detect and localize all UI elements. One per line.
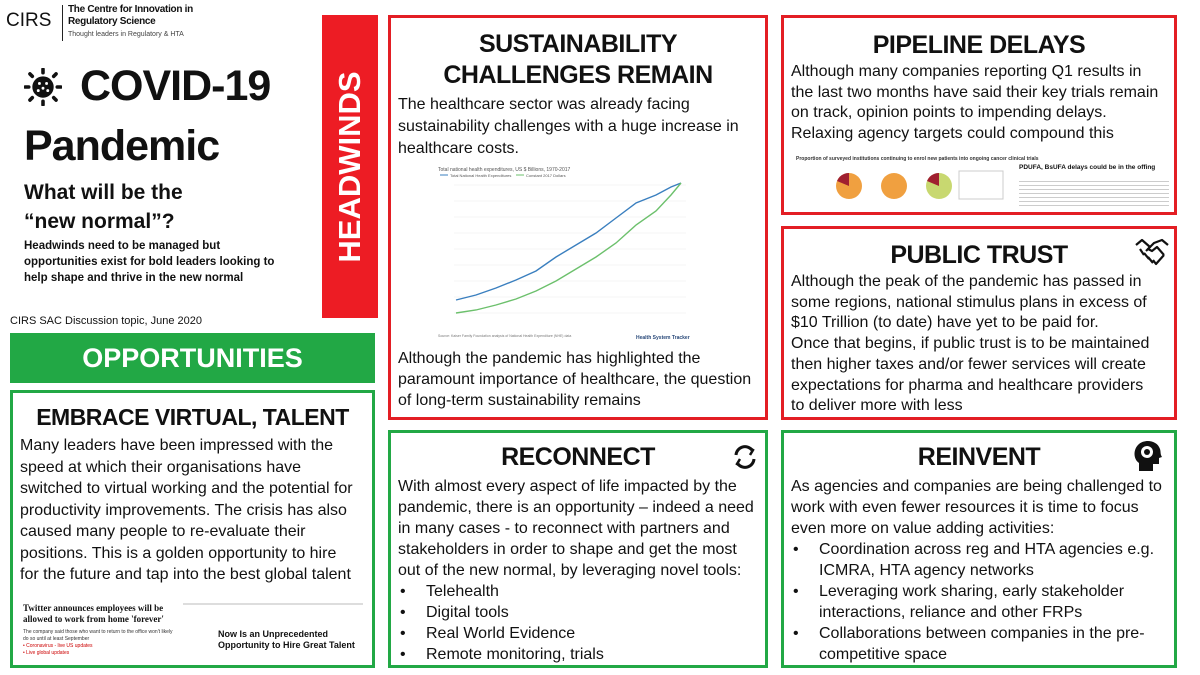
panel: embrace virtual talent: caused many people to re-evaluate their bbox=[20, 523, 306, 540]
panel: reinvent: interactions, reliance and other FRPs bbox=[819, 604, 1082, 621]
title block: Pandemic bbox=[24, 122, 219, 170]
panel: embrace virtual talent: switched to virtual working and the potential for bbox=[20, 480, 353, 497]
news clippings bbox=[23, 603, 363, 656]
panel: public trust: Although the peak of the pandemic has passed in bbox=[791, 273, 1141, 290]
headwinds bar: HEADWINDS bbox=[332, 71, 367, 262]
icon: handshake bbox=[1135, 238, 1169, 266]
panel: sustainability bbox=[388, 15, 768, 420]
panel: sustainability: of long-term sustainability remains bbox=[398, 392, 641, 409]
panel: reinvent bbox=[781, 430, 1177, 668]
clipping: pie charts and article: Proportion of surveyed institutions continuing to enrol new patients into ongoing cancer clinical trials bbox=[796, 156, 1039, 162]
panel: sustainability: The healthcare sector was already facing bbox=[398, 96, 690, 113]
panel: reinvent: ICMRA, HTA agency networks bbox=[819, 562, 1034, 579]
logo: The Centre for Innovation in bbox=[68, 4, 193, 15]
panel: embrace virtual talent: EMBRACE VIRTUAL, TALENT bbox=[36, 404, 349, 430]
panel: sustainability: SUSTAINABILITY bbox=[479, 30, 677, 58]
panel: pipeline delays: Relaxing agency targets could compound this bbox=[791, 124, 1114, 142]
panel: reconnect: out of the new normal, by leveraging novel tools: bbox=[398, 562, 741, 579]
panel: pipeline delays bbox=[781, 15, 1177, 215]
chart: national health expenditure: Total National Health Expenditures bbox=[450, 173, 511, 178]
opportunities bar: OPPORTUNITIES bbox=[82, 343, 303, 373]
chart: national health expenditure: Source: Kaiser Family Foundation analysis of National Health Expenditure (NHE) data bbox=[438, 334, 571, 338]
panel: embrace virtual talent: positions. This is a golden opportunity to hire bbox=[20, 544, 336, 562]
icon: head with lightbulb bbox=[1134, 441, 1162, 471]
panel: reinvent: competitive space bbox=[819, 646, 947, 663]
news clippings: • Coronavirus - live US updates bbox=[23, 643, 93, 649]
clipping: pie charts and article: PDUFA, BsUFA delays could be in the offing bbox=[1019, 164, 1155, 171]
chart: national health expenditure: Health System Tracker bbox=[636, 335, 690, 341]
panel: public trust: expectations for pharma and healthcare providers bbox=[791, 377, 1143, 394]
panel: reconnect: Remote monitoring, trials bbox=[426, 646, 604, 663]
footnote: CIRS SAC Discussion topic, June 2020 bbox=[10, 315, 202, 327]
panel: reconnect: Telehealth bbox=[426, 583, 499, 600]
panel: embrace virtual talent: productivity improvements. The crisis has also bbox=[20, 502, 347, 518]
clipping: pie charts and article bbox=[796, 156, 1169, 206]
panel: reinvent: work with even fewer resources it is time to focus bbox=[791, 499, 1139, 516]
panel: embrace virtual talent: speed at which their organisations have bbox=[20, 458, 301, 476]
chart: national health expenditure: Total national health expenditures, US $ Billions, 1970-2017 bbox=[438, 167, 571, 173]
panel: embrace virtual talent: Many leaders have been impressed with the bbox=[20, 437, 333, 454]
icon: refresh bbox=[734, 445, 756, 469]
icon: virus bbox=[24, 68, 62, 106]
title block: “new normal”? bbox=[24, 210, 175, 233]
title block: opportunities exist for bold leaders looking to bbox=[24, 256, 274, 268]
title block: COVID-19 bbox=[80, 62, 270, 110]
panel: reconnect: Digital tools bbox=[426, 604, 509, 621]
opportunities bar bbox=[10, 333, 375, 383]
panel: public trust: some regions, national stimulus plans in excess of bbox=[791, 294, 1147, 311]
title block bbox=[24, 62, 274, 284]
panel: pipeline delays: PIPELINE DELAYS bbox=[873, 31, 1085, 59]
panel: embrace virtual talent bbox=[10, 390, 375, 668]
panel: public trust: then higher taxes and/or fewer services will create bbox=[791, 356, 1146, 373]
logo: Thought leaders in Regulatory & HTA bbox=[68, 31, 184, 38]
panel: pipeline delays: the last two months have said their key trials remain bbox=[791, 84, 1158, 100]
chart: national health expenditure: Constant 2017 Dollars bbox=[526, 173, 566, 178]
chart: national health expenditure bbox=[438, 167, 690, 341]
title block: What will be the bbox=[24, 181, 183, 204]
panel: reconnect: RECONNECT bbox=[501, 443, 655, 471]
panel: reconnect: With almost every aspect of life impacted by the bbox=[398, 478, 737, 495]
panel: reinvent: even more on value adding activities: bbox=[791, 520, 1054, 537]
news clippings: • Live global updates bbox=[23, 650, 69, 656]
panel: reconnect bbox=[388, 430, 768, 668]
panel: reinvent: REINVENT bbox=[918, 443, 1040, 471]
news clippings: Opportunity to Hire Great Talent bbox=[218, 640, 355, 650]
panel: sustainability: CHALLENGES REMAIN bbox=[443, 61, 713, 89]
panel: pipeline delays: on track, opinion points to impending delays. bbox=[791, 104, 1107, 121]
panel: public trust: PUBLIC TRUST bbox=[890, 241, 1068, 269]
news clippings: Twitter announces employees will be allowed to work from home 'forever' bbox=[23, 603, 164, 624]
panel: reconnect: stakeholders in order to shape and get the most bbox=[398, 541, 737, 558]
headwinds bar bbox=[322, 15, 378, 318]
panel: reinvent: Collaborations between companies in the pre- bbox=[819, 625, 1145, 642]
panel: reinvent: Coordination across reg and HTA agencies e.g. bbox=[819, 541, 1154, 558]
panel: sustainability: sustainability challenges with a huge increase in bbox=[398, 118, 739, 135]
panel: sustainability: paramount importance of healthcare, the question bbox=[398, 371, 751, 388]
panel: public trust: $10 Trillion (to date) have yet to be paid for. bbox=[791, 314, 1099, 331]
logo: Regulatory Science bbox=[68, 16, 155, 27]
panel: pipeline delays: Although many companies reporting Q1 results in bbox=[791, 63, 1141, 80]
panel: reconnect: in many cases - to reconnect with partners and bbox=[398, 520, 730, 537]
panel: reconnect: pandemic, there is an opportunity – indeed a need bbox=[398, 499, 754, 516]
panel: reconnect: Real World Evidence bbox=[426, 625, 575, 642]
panel: sustainability: healthcare costs. bbox=[398, 140, 519, 157]
news clippings: Now Is an Unprecedented bbox=[218, 629, 328, 639]
panel: public trust: Once that begins, if public trust is to be maintained bbox=[791, 335, 1149, 352]
title block: help shape and thrive in the new normal bbox=[24, 272, 243, 284]
panel: reinvent: Leveraging work sharing, early stakeholder bbox=[819, 583, 1124, 600]
news clippings: The company said those who want to return to the office won't likely do so until at least September bbox=[23, 629, 173, 642]
panel: public trust bbox=[781, 226, 1177, 420]
panel: sustainability: Although the pandemic has highlighted the bbox=[398, 350, 700, 367]
panel: public trust: to deliver more with less bbox=[791, 397, 963, 414]
logo: CIRS bbox=[6, 10, 51, 31]
logo bbox=[6, 4, 193, 41]
panel: embrace virtual talent: for the future and tap into the best global talent bbox=[20, 566, 351, 583]
title block: Headwinds need to be managed but bbox=[24, 240, 220, 252]
panel: reinvent: As agencies and companies are being challenged to bbox=[791, 478, 1162, 495]
